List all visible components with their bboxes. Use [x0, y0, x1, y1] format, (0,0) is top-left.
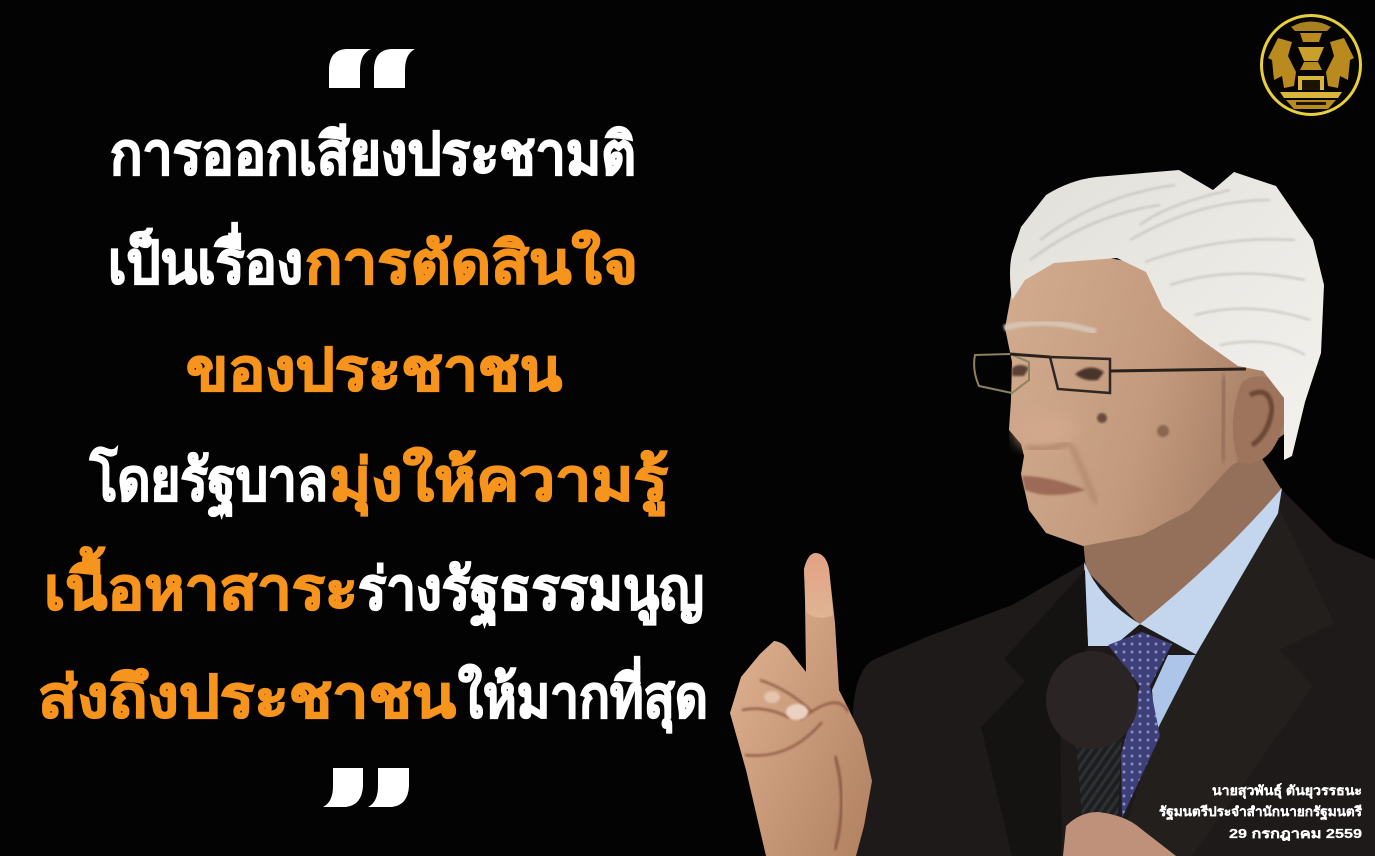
line 3: ของประชาชน — [186, 338, 562, 403]
line 4 — [89, 445, 668, 518]
hair — [1010, 170, 1324, 460]
portrait photo of the speaker — [730, 170, 1375, 856]
line 6: ส่งถึงประชาชน — [38, 665, 456, 730]
necktie — [1108, 632, 1172, 818]
top ornament — [1291, 22, 1331, 31]
microphone — [1046, 651, 1138, 815]
line 2: เป็นเรื่อง — [108, 222, 303, 296]
neck — [1083, 440, 1282, 625]
line 5: เนื้อหาสาระ — [44, 547, 358, 622]
line 6: ให้มากที่สุด — [458, 656, 708, 734]
line 2: การตัดสินใจ — [305, 229, 638, 296]
opening quotation mark — [329, 49, 415, 88]
right lapel — [1117, 510, 1334, 856]
offering bowl — [1300, 33, 1322, 42]
suit jacket — [853, 488, 1375, 856]
line 6 — [38, 656, 708, 734]
line 5 — [44, 547, 704, 627]
ear — [1233, 376, 1285, 464]
line 4: โดยรัฐบาล — [89, 445, 328, 518]
line 2 — [108, 222, 638, 296]
shirt collar — [1084, 488, 1282, 736]
speaker credit: รัฐมนตรีประจำสำนักนายกรัฐมนตรี — [1159, 804, 1362, 821]
base — [1298, 76, 1324, 90]
left lion — [1268, 38, 1296, 88]
line 4: มุ่งให้ความรู้ — [329, 446, 668, 517]
line 1: การออกเสียงประชามติ — [110, 122, 636, 187]
facial shading — [1004, 323, 1225, 503]
eyeglasses — [974, 354, 1246, 393]
right lion — [1326, 38, 1354, 88]
closing quotation mark — [323, 768, 409, 807]
speaker credit: นายสุวพันธุ์ ตันยุวรรธนะ — [1212, 783, 1362, 799]
face — [1005, 250, 1290, 546]
quote headline — [38, 122, 708, 734]
speaker credit — [1159, 783, 1362, 842]
government seal emblem — [1259, 13, 1363, 117]
left lapel — [981, 570, 1088, 856]
raised hand — [730, 553, 872, 856]
speaker credit: 29 กรกฎาคม 2559 — [1229, 826, 1362, 842]
hair strands — [1030, 185, 1310, 355]
line 5: ร่างรัฐธรรมนูญ — [358, 557, 704, 627]
lower hand holding microphone — [1063, 812, 1176, 856]
